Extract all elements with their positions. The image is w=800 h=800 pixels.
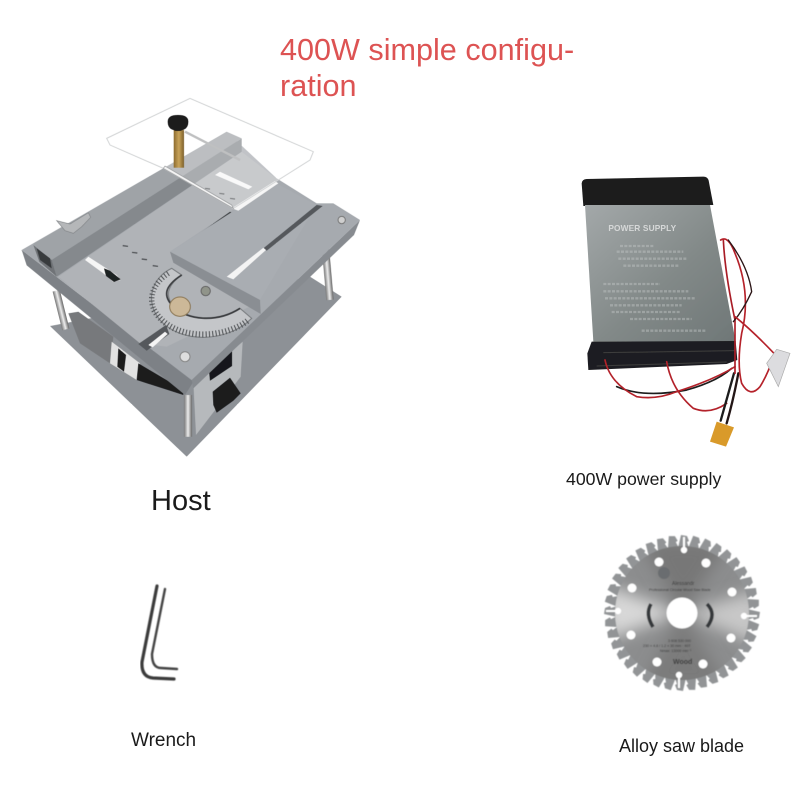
grey panel — [585, 205, 736, 342]
blade text: Wood — [673, 659, 692, 666]
wing slots — [263, 205, 323, 251]
title: ration — [280, 69, 357, 103]
wing nut — [57, 213, 91, 233]
blade text: 230 × 4.8 / 1.2 × 30 mm · 40T — [643, 644, 691, 648]
upper right slot — [178, 212, 233, 250]
grey panel: POWER SUPPLY — [608, 223, 677, 233]
black top cap — [582, 177, 713, 206]
label: power supply: 400W power supply — [566, 469, 721, 489]
black knob — [168, 115, 188, 131]
screws — [180, 352, 190, 362]
brass post — [174, 130, 184, 168]
fence — [33, 132, 242, 277]
ruler ticks — [123, 188, 235, 266]
teeth — [590, 521, 774, 705]
mitre slide table — [170, 183, 317, 300]
centre hole — [666, 598, 698, 628]
icon: power supply — [582, 177, 790, 447]
logo — [658, 567, 670, 579]
base plate — [50, 277, 342, 457]
blade text: Alessandr — [672, 581, 695, 587]
protractor — [152, 268, 252, 337]
blade slot end — [104, 268, 121, 282]
title — [280, 33, 574, 103]
motor — [68, 312, 183, 395]
speed knob — [213, 378, 241, 413]
blade text — [643, 581, 711, 666]
label: wrench: Wrench — [131, 730, 196, 751]
rear support legs — [53, 246, 334, 330]
icon: table saw host — [22, 98, 360, 457]
rotation arrows — [648, 604, 712, 627]
blade text: 3 608 530 000 — [668, 639, 691, 643]
rocker switch — [209, 348, 232, 381]
white connector — [767, 349, 790, 387]
gauge plate area — [58, 152, 278, 347]
label: saw blade: Alloy saw blade — [619, 736, 744, 756]
blade slot — [85, 257, 121, 282]
wires — [605, 239, 773, 423]
blade text: Nmax: 13000 min⁻¹ — [660, 649, 692, 653]
black bottom cap — [587, 341, 737, 370]
front leg and control panel — [184, 342, 243, 437]
slots and holes — [606, 537, 757, 688]
blade text: Professional Circular Wood Saw Blade — [649, 588, 711, 592]
label: host: Host — [151, 485, 211, 517]
mitre slot — [138, 325, 169, 351]
rim glare — [232, 181, 278, 211]
table top — [22, 132, 360, 395]
rear slot window — [215, 172, 252, 189]
icon: wrench — [142, 586, 177, 679]
yellow XT connector — [710, 422, 734, 447]
disc sheen — [614, 546, 750, 680]
title: 400W simple configu- — [280, 33, 574, 67]
brass knob — [170, 297, 190, 316]
acrylic guard — [107, 98, 313, 208]
disc — [615, 546, 749, 680]
icon: saw blade — [604, 534, 760, 692]
